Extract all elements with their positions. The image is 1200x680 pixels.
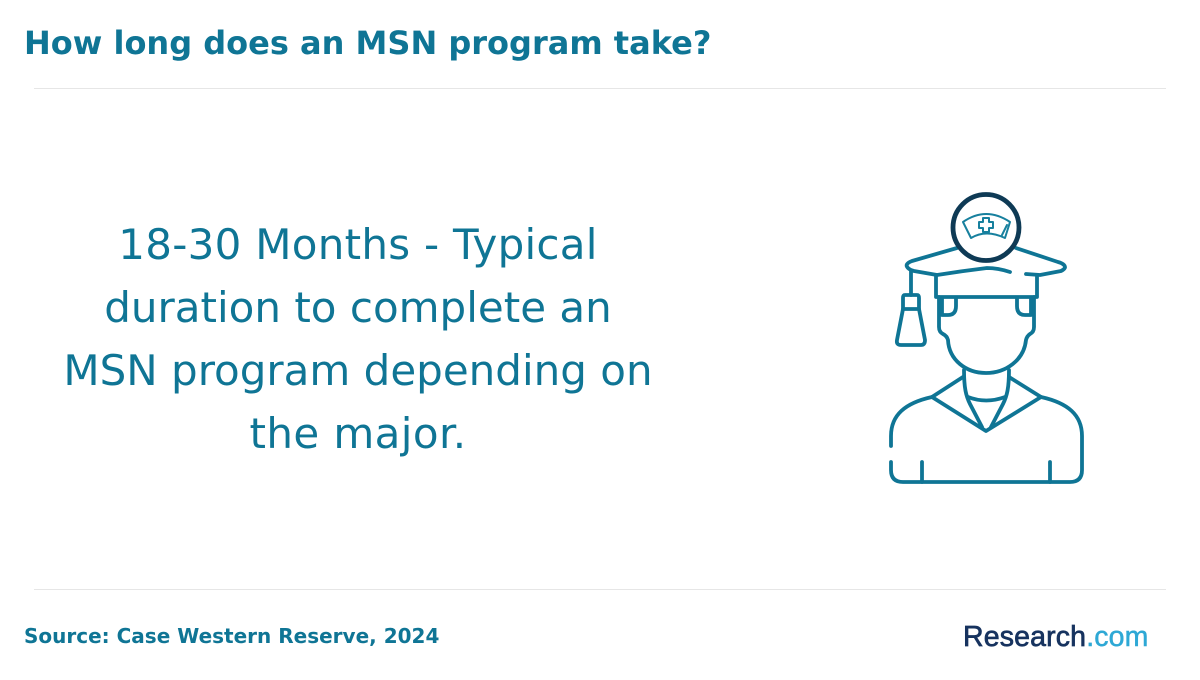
logo: Research.com bbox=[963, 621, 1149, 653]
main statement: MSN program depending on bbox=[63, 346, 653, 395]
source note: Source: Case Western Reserve, 2024 bbox=[24, 624, 439, 648]
main statement bbox=[63, 220, 653, 458]
icon: circle badge bbox=[953, 194, 1019, 260]
icon: neck and collar bbox=[932, 370, 1041, 431]
icon: face and hair bbox=[939, 297, 1034, 373]
icon: mortarboard cap bbox=[907, 248, 1065, 297]
icon: tassel bbox=[897, 271, 925, 345]
main statement: the major. bbox=[249, 409, 467, 458]
icon: shoulders and body bbox=[891, 397, 1082, 482]
main statement: duration to complete an bbox=[104, 283, 612, 332]
title: How long does an MSN program take? bbox=[24, 24, 711, 62]
icon: nurse hat bbox=[963, 214, 1010, 238]
main statement: 18-30 Months - Typical bbox=[118, 220, 598, 269]
